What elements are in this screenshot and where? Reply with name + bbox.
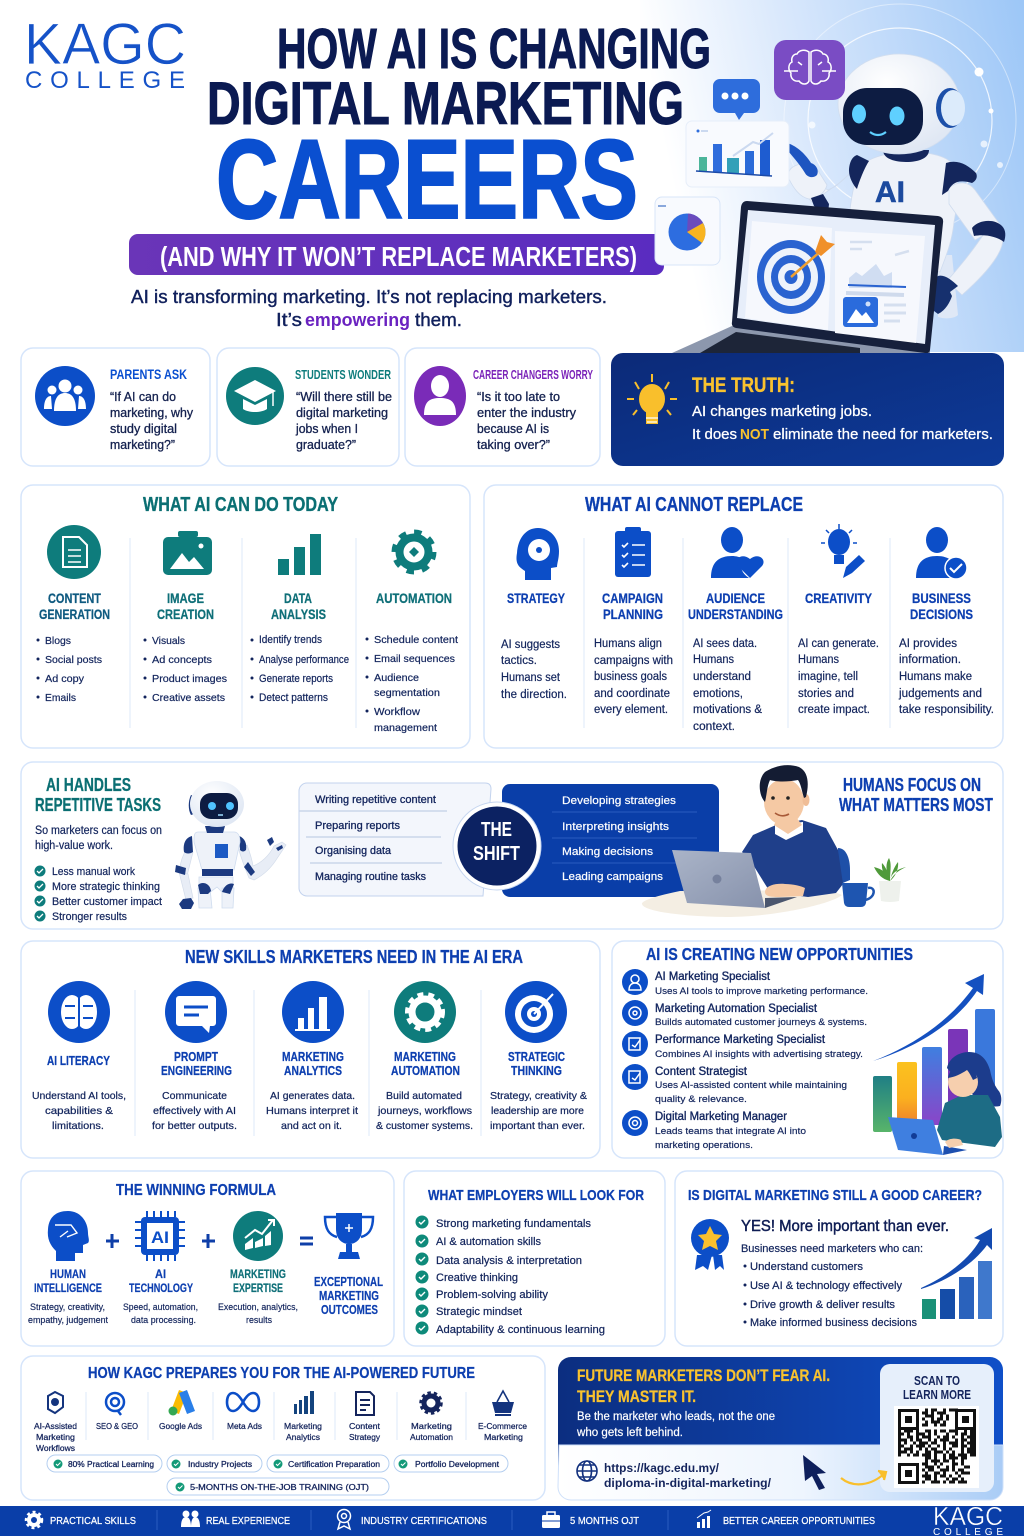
title [207, 17, 711, 242]
panel: what AI can do today: Blogs [45, 635, 71, 647]
list: tasks humans focus on: Interpreting insights [562, 821, 670, 833]
panel: what AI can do today: management [374, 722, 437, 734]
pills: programme benefits: Portfolio Development [415, 1459, 500, 1469]
icon: person heart [711, 527, 764, 578]
panel: what AI cannot replace: create impact. [798, 704, 870, 716]
panel: the shift: Less manual work [52, 866, 135, 878]
panel: new skills: STRATEGIC [508, 1049, 565, 1064]
card: career changers worry: enter the industry [477, 406, 577, 420]
footer bar: BETTER CAREER OPPORTUNITIES [723, 1515, 875, 1527]
panel: how KAGC prepares you [21, 1356, 545, 1500]
bar chart card [686, 121, 789, 187]
panel: the shift: More strategic thinking [52, 881, 160, 893]
panel: what AI can do today: Schedule content [374, 634, 458, 646]
panel: the shift: AI HANDLES [46, 775, 131, 795]
icon: briefcase [542, 1512, 560, 1528]
icon: parents [35, 366, 95, 426]
icon: automation gear [394, 981, 456, 1043]
panel: what employers will look for [404, 1171, 665, 1346]
panel: new skills: PROMPT [174, 1049, 218, 1064]
panel: the winning formula: THE WINNING FORMULA [116, 1182, 276, 1199]
panel: the shift: REPETITIVE TASKS [35, 795, 161, 815]
panel: call to action: https://kagc.edu.my/ [604, 1461, 720, 1475]
footer bar: REAL EXPERIENCE [206, 1515, 290, 1527]
panel: what AI can do today: CONTENT [48, 591, 102, 606]
list: tasks AI handles: Organising data [315, 845, 392, 857]
panel: new skills: NEW SKILLS MARKETERS NEED IN THE AI ERA [185, 947, 523, 967]
panel: the truth [611, 353, 1004, 466]
icon: workflows [48, 1392, 63, 1413]
panel: the winning formula: Execution, analytics, [218, 1302, 298, 1313]
panel: how KAGC prepares you: Google Ads [159, 1421, 202, 1431]
panel: what AI can do today: GENERATION [39, 607, 110, 622]
panel: what AI cannot replace: DECISIONS [910, 607, 973, 622]
panel: how KAGC prepares you: AI-Assisted [34, 1421, 77, 1431]
panel: what employers will look for: Problem-solving ability [436, 1289, 549, 1301]
card: students wonder: digital marketing [296, 406, 388, 420]
panel: new skills: THINKING [511, 1063, 562, 1078]
panel: still a good career: Make informed business decisions [750, 1317, 917, 1329]
panel: the winning formula: EXPERTISE [233, 1281, 283, 1295]
panel: what AI can do today: ANALYSIS [271, 607, 326, 622]
panel: new skills: Build automated [386, 1090, 462, 1102]
panel: what AI cannot replace: business goals [594, 671, 667, 683]
panel: new skills: ANALYTICS [284, 1063, 342, 1078]
panel: call to action: diploma-in-digital-marketing/ [604, 1476, 772, 1490]
panel: the winning formula: Strategy, creativity, [30, 1302, 105, 1313]
panel: the shift: high-value work. [35, 840, 113, 852]
list: tasks humans focus on: Developing strategies [562, 795, 677, 807]
icon: people [181, 1510, 200, 1527]
panel: what AI can do today: Creative assets [152, 692, 225, 704]
panel: new skills: Humans interpret it [266, 1105, 358, 1117]
chat badge [713, 79, 760, 120]
panel: the winning formula: empathy, judgement [28, 1315, 108, 1326]
icon: AI chip: AI [151, 1228, 169, 1247]
illustration: small robot [175, 781, 286, 909]
title: DIGITAL MARKETING [207, 70, 684, 137]
panel: new skills: effectively with AI [153, 1105, 236, 1117]
panel: what AI cannot replace: understand [693, 671, 751, 683]
panel: the winning formula [21, 1171, 394, 1346]
icon: growth chart [697, 1510, 711, 1528]
panel: what AI can do today: Audience [374, 672, 419, 684]
pie card [655, 197, 720, 265]
panel: new skills: Strategy, creativity & [490, 1090, 587, 1102]
panel: what AI can do today: IMAGE [167, 591, 204, 606]
panel: how KAGC prepares you: Workflows [36, 1443, 75, 1453]
panel: call to action: who gets left behind. [576, 1427, 683, 1439]
card: students wonder: graduate?” [296, 438, 356, 452]
illustration: robot with laptop [655, 4, 1016, 353]
card: parents ask [21, 348, 210, 466]
panel: the winning formula: MARKETING [319, 1288, 379, 1303]
panel: what AI can do today: CREATION [157, 607, 214, 622]
QR card: SCAN TO [914, 1373, 960, 1388]
panel: new opportunities: Builds automated customer journeys & systems. [655, 1017, 867, 1028]
panel: new opportunities [612, 941, 1003, 1158]
list: tasks AI handles: Writing repetitive content [315, 794, 436, 806]
panel: what AI cannot replace: and coordinate [594, 688, 670, 700]
card: students wonder: STUDENTS WONDER [295, 367, 391, 382]
panel: what AI can do today: AUTOMATION [376, 591, 452, 606]
footer bar: 5 MONTHS OJT [570, 1515, 640, 1527]
footer logo: KAGC [933, 1501, 1003, 1531]
panel: the truth: eliminate the need for marketers. [773, 426, 993, 443]
QR card [880, 1364, 994, 1492]
panel: what AI can do today: Ad concepts [152, 654, 212, 666]
panel: still a good career [675, 1171, 1003, 1346]
logo: KAGC College: KAGC [24, 12, 186, 77]
panel: how KAGC prepares you: Meta Ads [227, 1421, 262, 1431]
illustration: robot with laptop: AI [875, 176, 905, 209]
panel: the winning formula: Speed, automation, [123, 1302, 198, 1313]
panel: what AI can do today: DATA [284, 591, 312, 606]
panel: the shift [21, 762, 1003, 929]
panel: how KAGC prepares you: Marketing [411, 1421, 452, 1431]
panel: the truth: NOT [740, 426, 769, 443]
panel: the winning formula: OUTCOMES [321, 1302, 378, 1317]
list: tasks AI handles: Preparing reports [315, 820, 400, 832]
panel: new opportunities: Marketing Automation Specialist [655, 1003, 818, 1015]
panel: how KAGC prepares you: Marketing [484, 1432, 523, 1442]
badge: the shift [453, 802, 541, 890]
panel: the shift: Better customer impact [52, 896, 162, 908]
panel: what employers will look for: Adaptability & continuous learning [436, 1324, 605, 1336]
panel: what AI can do today: WHAT AI CAN DO TODAY [143, 494, 339, 516]
icon: expertise chart [233, 1211, 283, 1261]
icon: cursor [803, 1455, 826, 1490]
panel: how KAGC prepares you: Marketing [36, 1432, 75, 1442]
chart: growth bars [873, 974, 995, 1132]
subtitle banner: (AND WHY IT WON’T REPLACE MARKETERS) [160, 241, 637, 272]
panel: what AI cannot replace: Humans align [594, 638, 662, 650]
panel: how KAGC prepares you: Analytics [286, 1432, 320, 1442]
panel: new opportunities: Leads teams that integrate AI into [655, 1126, 806, 1137]
panel: what AI cannot replace: tactics. [501, 655, 537, 667]
icon: gear [26, 1512, 42, 1528]
card: parents ask: “If AI can do [110, 390, 176, 404]
panel: how KAGC prepares you: Content [349, 1421, 381, 1431]
panel: what AI can do today: Generate reports [259, 673, 333, 685]
panel: new opportunities: Uses AI-assisted content while maintaining [655, 1080, 847, 1091]
card: career changers worry: “Is it too late to [477, 390, 560, 404]
laptop screen [732, 201, 943, 353]
icon: bars [278, 534, 321, 575]
torso [848, 152, 958, 272]
icon: automation gear [420, 1392, 442, 1414]
panel: the winning formula: results [246, 1315, 272, 1326]
icon: gear [394, 532, 434, 572]
panel: new skills: AI LITERACY [47, 1053, 110, 1068]
card: career changers worry: CAREER CHANGERS WORRY [473, 368, 593, 382]
title: HOW AI IS CHANGING [277, 17, 711, 81]
panel: new skills: AI generates data. [270, 1090, 355, 1102]
panel: the truth: AI changes marketing jobs. [692, 403, 872, 420]
panel: new skills [21, 941, 600, 1158]
arrow: to QR code [841, 1471, 886, 1484]
panel: what AI cannot replace: Humans set [501, 672, 561, 684]
panel: what AI cannot replace: information. [899, 654, 961, 666]
icon: AI chip [135, 1211, 185, 1261]
panel: the winning formula: MARKETING [230, 1267, 286, 1281]
panel: new skills: journeys, workflows [377, 1105, 472, 1117]
robot right arm [949, 183, 1001, 240]
panel: what employers will look for: Strategic mindset [436, 1306, 522, 1318]
panel: what AI cannot replace: CAMPAIGN [602, 591, 663, 606]
head [883, 150, 929, 162]
panel: what AI can do today: Email sequences [374, 653, 455, 665]
panel: still a good career: Understand customers [750, 1261, 863, 1273]
illustration: man at laptop [642, 765, 906, 917]
icon: analytics bars [282, 981, 344, 1043]
panel: what AI can do today: segmentation [374, 687, 440, 699]
panel: what AI can do today: Detect patterns [259, 692, 328, 704]
icon: brain head [516, 528, 559, 580]
panel: what AI cannot replace: every element. [594, 704, 668, 716]
panel: the truth: THE TRUTH: [692, 374, 795, 397]
panel: what AI cannot replace: campaigns with [594, 655, 673, 667]
logo: KAGC College: COLLEGE [25, 67, 185, 94]
panel: new opportunities: quality & relevance. [655, 1094, 747, 1105]
card: students wonder: jobs when I [295, 422, 358, 436]
panel: how KAGC prepares you: Automation [410, 1432, 453, 1442]
panel: what AI can do today: Emails [45, 692, 76, 704]
icon: analytics [294, 1391, 314, 1414]
panel: new skills: MARKETING [282, 1049, 344, 1064]
panel: call to action [558, 1357, 1003, 1500]
panel: new skills: important than ever. [490, 1120, 585, 1132]
icon: clipboard [615, 527, 651, 577]
panel: what employers will look for: Strong marketing fundamentals [436, 1218, 591, 1230]
panel: what AI cannot replace: CREATIVITY [805, 591, 872, 606]
panel: what AI cannot replace: emotions, [693, 688, 743, 700]
panel: what AI can do today: Identify trends [259, 634, 322, 646]
panel: new skills: MARKETING [394, 1049, 456, 1064]
panel: new skills: ENGINEERING [161, 1063, 232, 1078]
illustration: woman with laptop [888, 1052, 1002, 1155]
icon: globe [577, 1461, 597, 1481]
panel: what AI cannot replace: judgements and [898, 688, 982, 700]
panel: what AI cannot replace: PLANNING [603, 607, 663, 622]
panel: new opportunities: Uses AI tools to improve marketing performance. [655, 986, 868, 997]
list: tasks humans focus on [502, 784, 719, 897]
icon: prompt bubble [165, 981, 227, 1043]
panel: new opportunities: Performance Marketing Specialist [655, 1034, 826, 1046]
panel: what employers will look for: Data analysis & interpretation [436, 1255, 582, 1267]
footer bar [0, 1501, 1024, 1536]
panel: what AI cannot replace: AUDIENCE [706, 591, 765, 606]
panel: what AI cannot replace: UNDERSTANDING [688, 607, 783, 622]
panel: new skills: Understand AI tools, [32, 1090, 126, 1102]
panel: the shift: HUMANS FOCUS ON [843, 775, 981, 795]
intro text: AI is transforming marketing. It’s not replacing marketers. [131, 287, 607, 307]
card: parents ask: study digital [110, 422, 177, 436]
icon: image [163, 531, 212, 575]
pills: programme benefits: Industry Projects [188, 1459, 252, 1469]
panel: new skills: leadership are more [491, 1105, 584, 1117]
card: students wonder: “Will there still be [296, 390, 392, 404]
panel: the winning formula: HUMAN [50, 1267, 86, 1281]
panel: how KAGC prepares you: Marketing [284, 1421, 322, 1431]
panel: the winning formula: EXCEPTIONAL [314, 1274, 383, 1289]
panel: what AI can do today: Social posts [45, 654, 102, 666]
icons: role badges [622, 969, 648, 1136]
intro text: empowering [305, 310, 410, 330]
panel: the shift: Stronger results [52, 911, 127, 923]
badge: the shift: THE [481, 819, 512, 841]
panel: still a good career: Drive growth & deliver results [750, 1299, 895, 1311]
QR card: LEARN MORE [903, 1387, 971, 1402]
panel: what AI cannot replace: the direction. [501, 689, 567, 701]
list: tasks AI handles: Managing routine tasks [315, 871, 426, 883]
panel: what AI can do today: Product images [152, 673, 227, 685]
panel: the winning formula: TECHNOLOGY [129, 1281, 193, 1295]
card: parents ask: PARENTS ASK [110, 367, 187, 382]
card: career changers worry: because AI is [477, 422, 549, 436]
list: tasks humans focus on: Making decisions [562, 846, 654, 858]
panel: what AI can do today [21, 485, 470, 748]
panel: the truth: It does [692, 426, 737, 443]
chart: rising bars [921, 1228, 992, 1319]
subtitle banner [129, 234, 664, 275]
icon: document [47, 525, 101, 579]
panel: what AI can do today: Visuals [152, 635, 185, 647]
panel: what AI can do today: Workflow [374, 706, 420, 718]
panel: call to action: Be the marketer who leads, not the one [577, 1411, 775, 1423]
icon: human head [48, 1211, 89, 1261]
icon: person [414, 366, 466, 426]
panel: what AI cannot replace: AI can generate. [798, 638, 879, 650]
panel: still a good career: Businesses need marketers who can: [741, 1243, 923, 1255]
panel: how KAGC prepares you: Strategy [349, 1432, 381, 1442]
panel: what AI cannot replace: context. [693, 721, 735, 733]
panel: still a good career: Use AI & technology effectively [750, 1280, 903, 1292]
operators [106, 1234, 313, 1248]
panel: what AI cannot replace: AI sees data. [693, 638, 757, 650]
icon: AI literacy brain [48, 981, 110, 1043]
icon: graduation cap [226, 367, 284, 425]
intro text: them. [415, 310, 462, 330]
panel: what AI can do today: Analyse performance [259, 654, 349, 666]
icon: strategic target [505, 981, 567, 1043]
panel: new skills: & customer systems. [376, 1120, 473, 1132]
icon: SEO [106, 1393, 124, 1415]
pills: programme benefits [47, 1455, 508, 1495]
panel: new opportunities: Combines AI insights with advertising strategy. [655, 1049, 863, 1060]
icon: medal [338, 1510, 350, 1529]
panel: new opportunities: Content Strategist [655, 1066, 748, 1078]
panel: how KAGC prepares you: SEO & GEO [96, 1421, 138, 1431]
panel: what AI cannot replace [484, 485, 1003, 748]
list: tasks humans focus on: Leading campaigns [562, 871, 664, 883]
panel: how KAGC prepares you: E-Commerce [478, 1421, 527, 1431]
pills: programme benefits: 80% Practical Learning [68, 1459, 154, 1469]
footer bar: INDUSTRY CERTIFICATIONS [361, 1515, 487, 1527]
card: career changers worry: taking over?” [477, 438, 550, 452]
card: students wonder [217, 348, 399, 466]
panel: how KAGC prepares you: HOW KAGC PREPARES YOU FOR THE AI-POWERED FUTURE [88, 1365, 475, 1382]
panel: new skills: capabilities & [45, 1105, 113, 1117]
title: CAREERS [216, 117, 638, 242]
panel: the winning formula: data processing. [131, 1315, 196, 1326]
card: career changers worry [405, 348, 600, 466]
intro text [131, 287, 607, 330]
panel: what employers will look for: AI & automation skills [436, 1236, 541, 1248]
panel: the winning formula: INTELLIGENCE [34, 1281, 102, 1295]
panel: new opportunities: Digital Marketing Manager [655, 1111, 787, 1123]
icon: Google Ads [168, 1390, 195, 1416]
panel: new opportunities: AI IS CREATING NEW OPPORTUNITIES [646, 944, 913, 964]
panel: what AI can do today: Ad copy [45, 673, 85, 685]
icon: content strategy [356, 1392, 374, 1415]
panel: the shift: So marketers can focus on [35, 825, 162, 837]
panel: what employers will look for: Creative thinking [436, 1272, 518, 1284]
panel: what AI cannot replace: AI suggests [501, 639, 560, 651]
brain badge [774, 40, 845, 100]
pills: programme benefits: 5-MONTHS ON-THE-JOB TRAINING (OJT) [190, 1482, 369, 1492]
icon: shopping basket [492, 1391, 514, 1415]
icon: Meta [227, 1393, 259, 1411]
panel: what AI cannot replace: STRATEGY [507, 591, 565, 606]
panel: new opportunities: AI Marketing Specialist [655, 971, 771, 983]
panel: what AI cannot replace: motivations & [693, 704, 762, 716]
icon: person check [916, 527, 967, 579]
panel: new skills: AUTOMATION [391, 1063, 460, 1078]
panel: the winning formula: AI [155, 1267, 166, 1281]
panel: what AI cannot replace: WHAT AI CANNOT REPLACE [585, 494, 803, 516]
panel: what AI cannot replace: BUSINESS [912, 591, 971, 606]
card: parents ask: marketing?” [110, 438, 175, 452]
panel: new skills: and act on it. [281, 1120, 342, 1132]
icon: trophy [325, 1213, 373, 1259]
panel: new skills: Communicate [162, 1090, 227, 1102]
panel: what AI cannot replace: stories and [798, 688, 854, 700]
panel: call to action: FUTURE MARKETERS DON’T FEAR AI. [577, 1366, 830, 1385]
intro text: It’s [276, 310, 302, 330]
panel: new skills: limitations. [52, 1120, 104, 1132]
card: parents ask: marketing, why [110, 406, 194, 420]
panel: what AI cannot replace: Humans [693, 654, 734, 666]
panel: what AI cannot replace: Humans make [899, 671, 972, 683]
panel: what AI cannot replace: imagine, tell [798, 671, 858, 683]
panel: call to action: THEY MASTER IT. [577, 1387, 696, 1406]
badge: the shift: SHIFT [473, 843, 520, 865]
list: tasks AI handles [299, 783, 491, 896]
icon: bulb and pencil [821, 524, 865, 578]
laptop keyboard base [672, 326, 930, 353]
pills: programme benefits: Certification Preparation [288, 1459, 380, 1469]
panel: new skills: for better outputs. [152, 1120, 237, 1132]
footer bar: PRACTICAL SKILLS [50, 1515, 136, 1527]
hip stub [938, 255, 958, 318]
panel: what AI cannot replace: Humans [798, 654, 839, 666]
panel: what employers will look for: WHAT EMPLOYERS WILL LOOK FOR [428, 1187, 644, 1204]
icon: medal [691, 1219, 729, 1270]
icon: light bulb [627, 374, 677, 424]
panel: still a good career: YES! More important than ever. [741, 1218, 949, 1235]
robot left arm [797, 166, 858, 202]
panel: what AI cannot replace: AI provides [899, 638, 957, 650]
panel: what AI cannot replace: take responsibility. [899, 704, 994, 716]
panel: new opportunities: marketing operations. [655, 1140, 753, 1151]
